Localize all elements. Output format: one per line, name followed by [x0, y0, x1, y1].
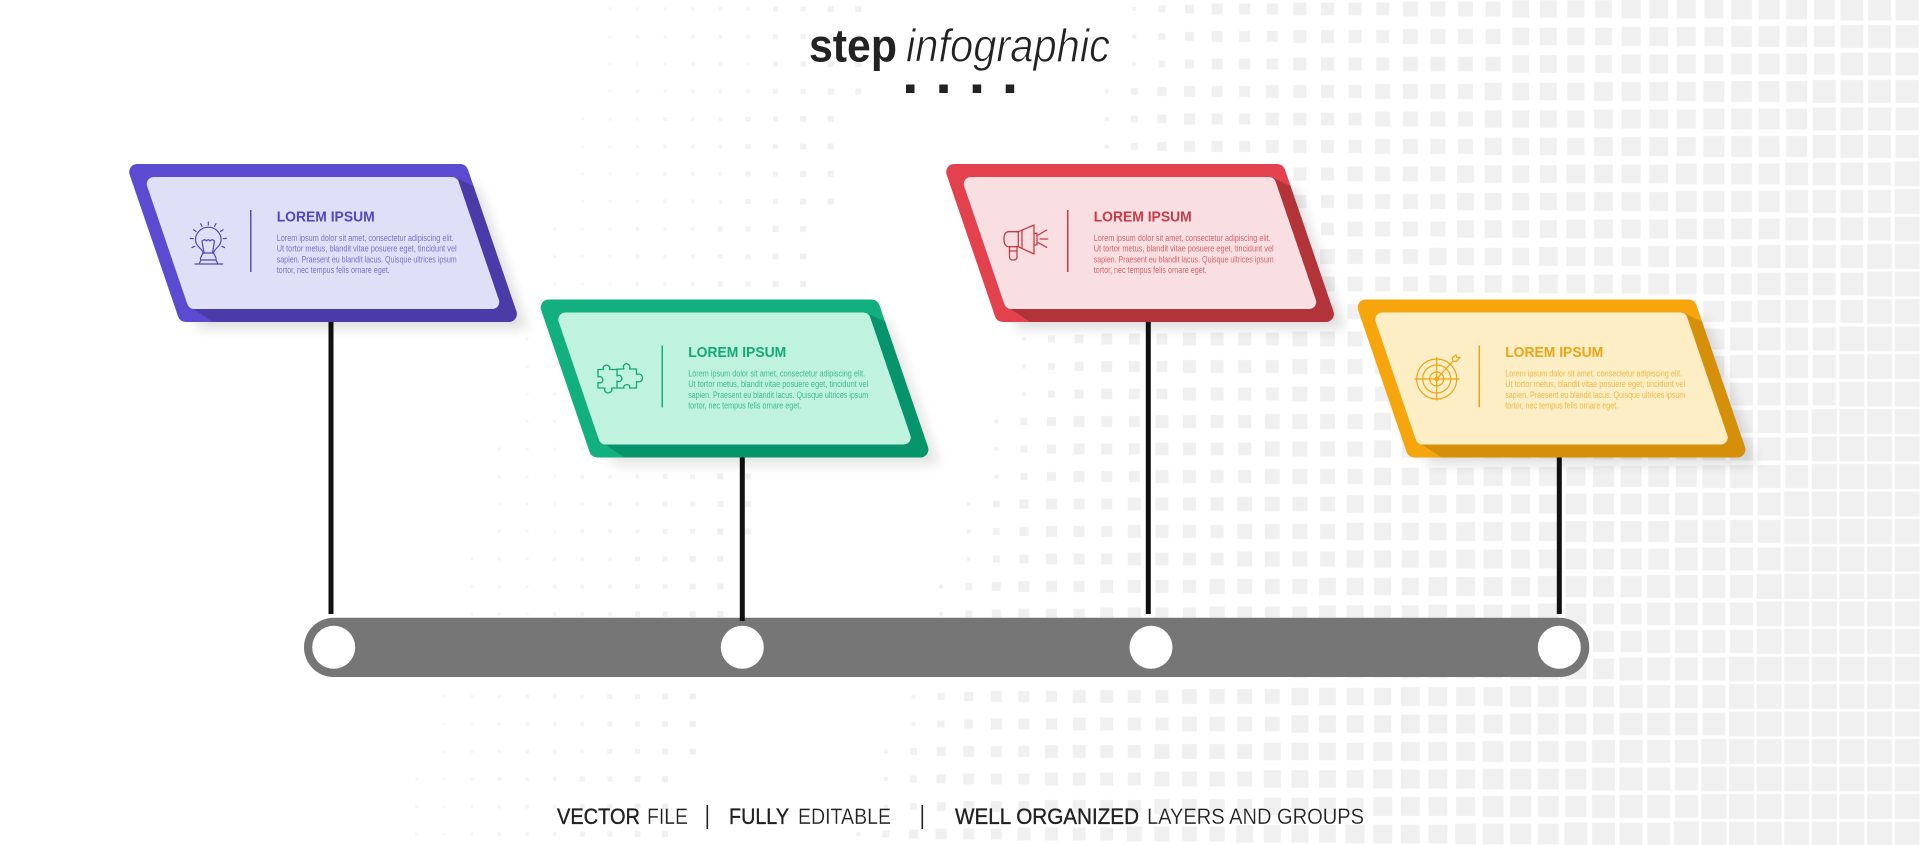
icon: megaphone [1004, 225, 1048, 260]
body text: Ut tortor metus, blandit vitae posuere eget, tincidunt vel [1505, 379, 1685, 389]
footer caption [557, 804, 1364, 829]
title: infographic [906, 20, 1110, 72]
body text: tortor, nec tempus felis ornare eget. [1094, 265, 1207, 275]
heading: LOREM IPSUM [277, 210, 375, 226]
timeline node 3 [1130, 626, 1172, 669]
connector pole 4 [1557, 457, 1562, 614]
body text: Lorem ipsum dolor sit amet, consectetur adipiscing elit. [688, 368, 865, 378]
footer caption: FILE [647, 804, 688, 829]
body text [1505, 368, 1685, 410]
body text: tortor, nec tempus felis ornare eget. [277, 265, 390, 275]
title: step [809, 20, 897, 72]
footer caption: WELL ORGANIZED [955, 804, 1139, 829]
body text [688, 368, 868, 410]
body text: tortor, nec tempus felis ornare eget. [688, 400, 801, 410]
title step markers [906, 84, 1014, 93]
panel: step 4 orange [1366, 308, 1756, 464]
body text [277, 233, 457, 275]
heading: LOREM IPSUM [1505, 345, 1603, 361]
footer caption: VECTOR [557, 804, 640, 829]
body text: Ut tortor metus, blandit vitae posuere eget, tincidunt vel [688, 379, 868, 389]
body text: Lorem ipsum dolor sit amet, consectetur adipiscing elit. [277, 233, 454, 243]
footer caption: EDITABLE [798, 804, 891, 829]
body text [1094, 233, 1274, 275]
background halftone pattern [403, 0, 1920, 845]
panel: step 3 red [954, 172, 1345, 329]
panel: step 1 purple [137, 172, 528, 329]
footer caption: LAYERS AND GROUPS [1147, 804, 1364, 829]
icon: puzzle pieces [598, 364, 642, 393]
footer caption: FULLY [729, 804, 789, 829]
connector pole 1 [328, 322, 334, 614]
connector pole 2 [740, 457, 745, 621]
timeline node 1 [312, 626, 355, 669]
timeline node 4 [1538, 626, 1581, 669]
timeline bar [304, 618, 1589, 677]
title [809, 20, 1110, 72]
body text: sapien. Praesent eu blandit lacus. Quisque ultrices ipsum [1505, 390, 1685, 400]
body text: Ut tortor metus, blandit vitae posuere eget, tincidunt vel [1094, 244, 1274, 254]
connector pole 3 [1146, 322, 1151, 614]
body text: Ut tortor metus, blandit vitae posuere eget, tincidunt vel [277, 244, 457, 254]
body text: sapien. Praesent eu blandit lacus. Quisque ultrices ipsum [1094, 254, 1274, 264]
icon: light bulb [190, 222, 226, 264]
panel: step 2 green [549, 308, 940, 464]
heading: LOREM IPSUM [688, 345, 786, 361]
body text: sapien. Praesent eu blandit lacus. Quisque ultrices ipsum [688, 390, 868, 400]
body text: Lorem ipsum dolor sit amet, consectetur adipiscing elit. [1505, 368, 1682, 378]
body text: sapien. Praesent eu blandit lacus. Quisque ultrices ipsum [277, 254, 457, 264]
body text: Lorem ipsum dolor sit amet, consectetur adipiscing elit. [1094, 233, 1271, 243]
heading: LOREM IPSUM [1094, 210, 1192, 226]
body text: tortor, nec tempus felis ornare eget. [1505, 400, 1618, 410]
timeline node 2 [721, 626, 764, 669]
icon: target with arrow [1415, 355, 1460, 400]
